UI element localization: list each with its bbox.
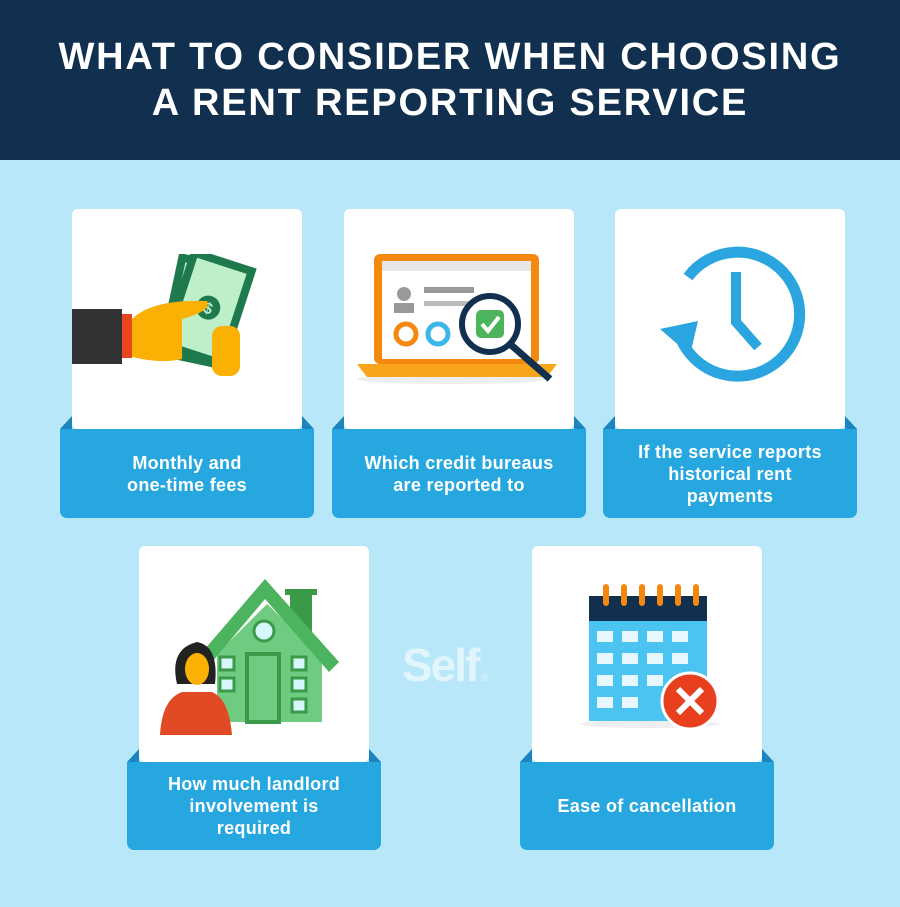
label band xyxy=(60,429,314,518)
label band xyxy=(127,762,381,850)
icon: clock arrow xyxy=(660,246,806,382)
panel: historical xyxy=(603,209,857,518)
label band xyxy=(332,429,586,518)
icon: calendar with x xyxy=(580,584,720,728)
header xyxy=(0,0,900,160)
label band xyxy=(603,429,857,518)
label band: involvement is xyxy=(189,796,319,816)
card xyxy=(72,209,302,429)
label band: How much landlord xyxy=(168,774,340,794)
panel: credit bureaus xyxy=(332,209,586,518)
logo: Self: Self. xyxy=(402,639,489,691)
label band: Ease of cancellation xyxy=(557,796,737,816)
label band: one-time fees xyxy=(127,474,247,494)
icon: hand with money xyxy=(72,254,257,376)
label band: required xyxy=(217,818,291,838)
fold corners xyxy=(60,416,72,429)
icon: house and woman xyxy=(160,579,339,735)
panel: fees xyxy=(60,209,314,518)
icon: hand with money: $ xyxy=(201,300,215,319)
panel: cancellation xyxy=(520,546,774,850)
header: A RENT REPORTING SERVICE xyxy=(152,82,748,124)
label band: Monthly and xyxy=(132,452,242,472)
panel: landlord xyxy=(127,546,381,850)
label band: Which credit bureaus xyxy=(364,452,554,472)
label band: historical rent xyxy=(668,464,792,484)
label band: are reported to xyxy=(393,474,525,494)
label band: If the service reports xyxy=(638,442,822,462)
label band: payments xyxy=(687,486,773,506)
header: WHAT TO CONSIDER WHEN CHOOSING xyxy=(58,36,842,78)
label band xyxy=(520,762,774,850)
icon: laptop with magnifier xyxy=(357,254,557,384)
